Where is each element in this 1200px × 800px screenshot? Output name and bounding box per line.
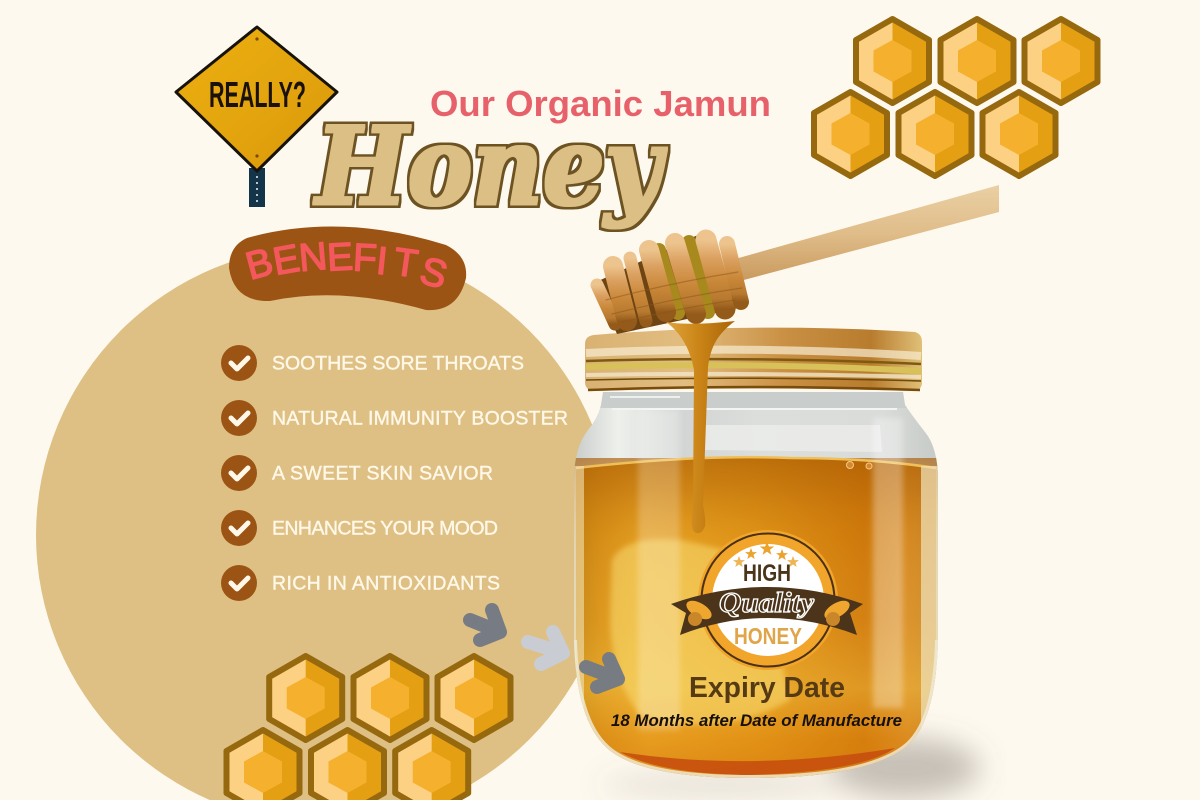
stars — [733, 542, 799, 567]
expiry detail: 18 Months after Date of Manufacture — [611, 712, 902, 730]
bees — [683, 597, 715, 623]
badge: high quality honey — [671, 530, 863, 670]
icon: really road sign: REALLY? — [209, 74, 306, 115]
ribbon — [671, 587, 863, 635]
glass left wall — [574, 466, 584, 708]
arrow 2 — [528, 632, 563, 664]
expiry heading: Expiry Date — [689, 672, 845, 704]
honey dipper — [594, 185, 999, 334]
arrow 3 — [586, 659, 618, 687]
jar shadow — [600, 738, 980, 798]
badge: high quality honey: Quality — [719, 587, 814, 619]
honey drip — [666, 321, 735, 533]
bubbles — [846, 462, 872, 469]
badge: high quality honey: HONEY — [734, 623, 802, 649]
title: Honey — [313, 104, 667, 230]
honey surface line — [576, 457, 936, 468]
neck shading — [600, 392, 910, 408]
benefits banner — [229, 227, 466, 310]
benefit 1: SOOTHES SORE THROATS — [272, 352, 524, 374]
dipper head — [594, 234, 748, 334]
benefit 4 — [221, 510, 498, 546]
pale inner glow — [610, 539, 790, 725]
benefit 5: RICH IN ANTIOXIDANTS — [272, 572, 500, 594]
honey jar — [574, 392, 939, 800]
panel: benefits circle — [36, 246, 614, 800]
glass base — [574, 640, 938, 778]
glass right wall — [921, 466, 938, 728]
dipper stick — [735, 185, 999, 281]
honeycomb bottom left — [226, 656, 510, 800]
left highlight stripe — [638, 410, 680, 730]
honey fill — [576, 458, 936, 800]
jar glass body — [574, 392, 938, 778]
badge: high quality honey: HIGH — [743, 560, 791, 587]
benefit 3: A SWEET SKIN SAVIOR — [272, 462, 493, 484]
bottom dark honey — [620, 748, 895, 775]
benefit 5 — [221, 565, 500, 601]
benefits list — [221, 345, 568, 601]
arrow 1 — [470, 610, 500, 640]
jar lid — [585, 328, 922, 391]
subtitle: Our Organic Jamun — [430, 83, 771, 124]
benefits banner: BENEFITS — [241, 235, 452, 298]
right highlight stripe — [873, 418, 903, 708]
benefit 3 — [221, 455, 493, 491]
benefit 4: ENHANCES YOUR MOOD — [272, 518, 498, 540]
honeycomb top right — [814, 19, 1098, 176]
icon: really road sign — [176, 27, 337, 207]
benefit 2: NATURAL IMMUNITY BOOSTER — [272, 408, 568, 430]
benefit 1 — [221, 345, 524, 381]
glass shoulder highlight — [698, 425, 882, 452]
benefit 2 — [221, 400, 568, 436]
